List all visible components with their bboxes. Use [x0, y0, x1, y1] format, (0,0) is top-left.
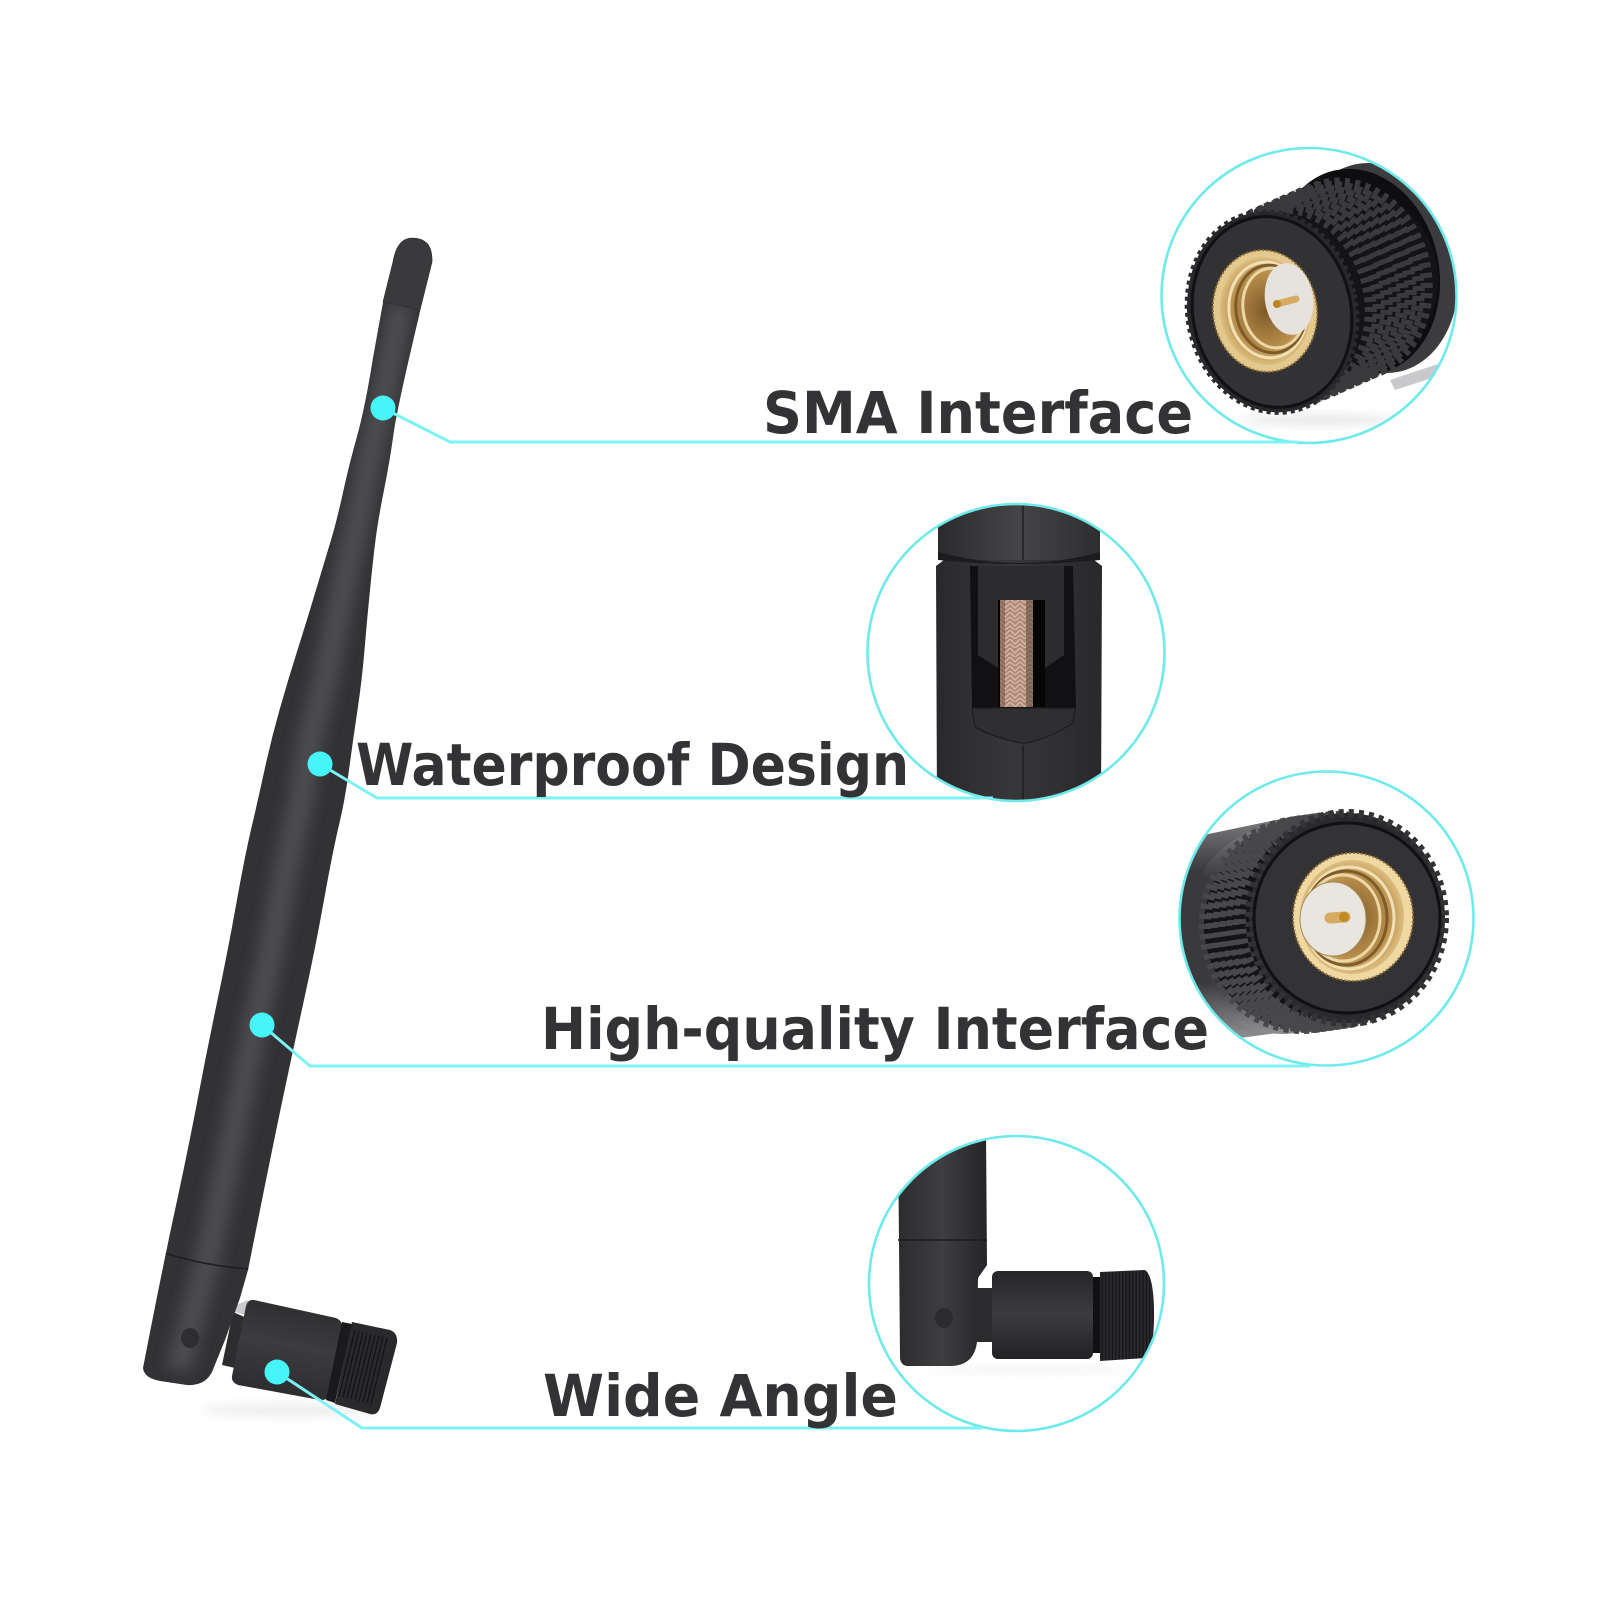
ring: Wide Angle: [869, 1136, 1164, 1431]
antenna floor shadow: [200, 1404, 380, 1416]
detail photo: front connector: [1170, 813, 1445, 1038]
detail photo: right-angle joint: [898, 1130, 1154, 1373]
callout: Wide Angle: [264, 1130, 1164, 1431]
antenna rounded tip: [383, 238, 432, 310]
detail photo: cable window: [936, 495, 1102, 810]
label: SMA Interface: SMA Interface: [763, 379, 1193, 447]
label: Wide Angle: Wide Angle: [543, 1362, 898, 1430]
connector highlight gap: [234, 1300, 250, 1316]
leader line: Wide Angle: [277, 1372, 983, 1428]
callout: High-quality Interface: [250, 772, 1474, 1066]
connector neck: [222, 1312, 247, 1368]
callout: Waterproof Design: [308, 495, 1164, 810]
leader line: High-quality Interface: [262, 1025, 1310, 1066]
marker dot: SMA Interface: [370, 396, 396, 420]
ring: SMA Interface: [1162, 148, 1456, 443]
ring: Waterproof Design: [868, 504, 1164, 801]
antenna product photo: [143, 238, 432, 1416]
ring: High-quality Interface: [1180, 772, 1474, 1066]
marker dot: Wide Angle: [264, 1360, 290, 1384]
antenna main whip body: [143, 298, 421, 1385]
connector barrel: [232, 1300, 342, 1400]
detail photo: SMA connector: [1184, 163, 1456, 427]
leader line: SMA Interface: [383, 408, 1297, 442]
leader line: Waterproof Design: [320, 764, 993, 798]
label: Waterproof Design: Waterproof Design: [356, 731, 909, 799]
callout: SMA Interface: [370, 148, 1477, 447]
label: High-quality Interface: High-quality Interface: [541, 995, 1209, 1063]
connector knurled nut: [326, 1322, 397, 1414]
marker dot: High-quality Interface: [250, 1012, 274, 1038]
marker dot: Waterproof Design: [308, 752, 332, 776]
